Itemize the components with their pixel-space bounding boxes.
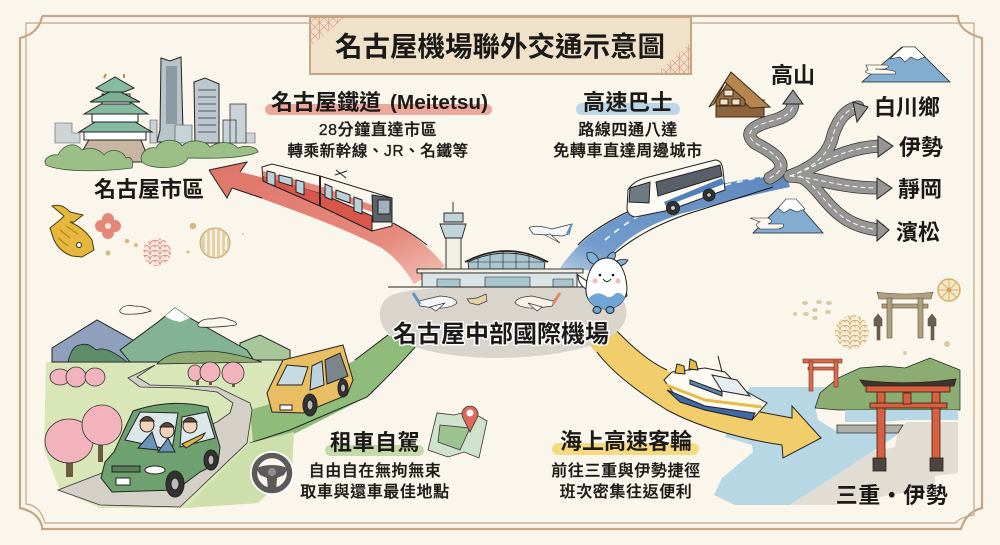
arrow: ferry route <box>587 327 821 458</box>
text: rental details <box>300 461 450 501</box>
gold motifs <box>793 279 960 355</box>
title banner <box>310 17 691 74</box>
sandy shore <box>790 422 958 505</box>
text: ferry details <box>551 462 701 501</box>
text: ferry details: 前往三重與伊勢捷徑 <box>551 462 701 480</box>
icon: large mount fuji <box>862 47 950 82</box>
destination: Hamamatsu: 濱松 <box>896 220 940 245</box>
heading: rental car: 租車自駕 <box>330 430 420 455</box>
heading: Meitetsu <box>265 90 492 115</box>
nagoya castle <box>76 74 152 162</box>
cherry trees <box>45 362 244 477</box>
destination: Takayama: 高山 <box>771 63 815 88</box>
text: bus details: 免轉車直達周邊城市 <box>553 141 703 160</box>
text: rental details: 自由自在無拘無束 <box>309 461 441 480</box>
icon: golden shachi <box>50 205 94 257</box>
terminal building <box>388 251 583 287</box>
destination: Ise: 伊勢 <box>899 135 943 160</box>
text: Meitetsu details: 轉乘新幹線、JR、名鐵等 <box>287 141 469 160</box>
green car <box>101 403 220 497</box>
branching roads <box>750 102 880 230</box>
city skyline <box>55 57 255 143</box>
city trees <box>45 140 258 171</box>
hill water <box>845 410 958 422</box>
road dashes <box>605 176 765 240</box>
winding road <box>58 365 252 507</box>
pier <box>837 425 903 433</box>
yellow van <box>267 345 353 416</box>
label: airport: 名古屋中部國際機場 <box>393 321 609 348</box>
mascot <box>578 252 628 314</box>
title banner: 名古屋機場聯外交通示意圖 <box>335 31 665 62</box>
heading: Meitetsu: 名古屋鐵道 <box>271 90 381 115</box>
heading: ferry: 海上高速客輪 <box>560 429 692 454</box>
arrow: highway bus route <box>560 172 790 271</box>
label: Mie Ise: 三重・伊勢 <box>836 483 948 508</box>
road edge <box>578 187 773 270</box>
arrow: railway to city <box>209 162 445 284</box>
large torii gate <box>860 379 956 471</box>
airport hub <box>380 202 628 358</box>
text: ferry details: 班次密集往返便利 <box>560 482 692 501</box>
airplanes <box>413 224 572 311</box>
arrow: rental car route <box>250 335 417 443</box>
icon: gassho house <box>709 72 770 117</box>
train <box>262 164 392 231</box>
text: bus details <box>553 121 703 160</box>
text: Meitetsu details <box>287 120 469 160</box>
label: Nagoya city: 名古屋市區 <box>94 177 204 202</box>
destination: Shizuoka: 靜岡 <box>898 177 942 202</box>
heading: Meitetsu: (Meitetsu) <box>390 92 488 114</box>
heading: highway bus: 高速巴士 <box>583 90 673 115</box>
text: rental details: 取車與還車最佳地點 <box>300 483 450 501</box>
text: Meitetsu details: 28分鐘直達市區 <box>319 120 437 139</box>
small red torii <box>803 359 842 391</box>
icon: small mount fuji <box>750 199 823 233</box>
apron <box>380 287 626 358</box>
branch arrowheads <box>783 90 893 241</box>
icon: steering wheel <box>250 451 294 495</box>
tan torii and lanterns <box>874 292 936 340</box>
sea <box>714 387 900 505</box>
text: bus details: 路線四通八達 <box>578 121 678 139</box>
icon: map with pin <box>428 406 487 458</box>
control tower <box>440 202 466 270</box>
landscape: fields <box>44 306 295 508</box>
bus <box>627 160 725 217</box>
decorative motifs <box>95 213 244 266</box>
green hill <box>815 358 960 410</box>
lower green field <box>186 432 294 508</box>
destination: Shirakawa-go: 白川鄉 <box>874 95 940 120</box>
ferry <box>664 356 767 420</box>
